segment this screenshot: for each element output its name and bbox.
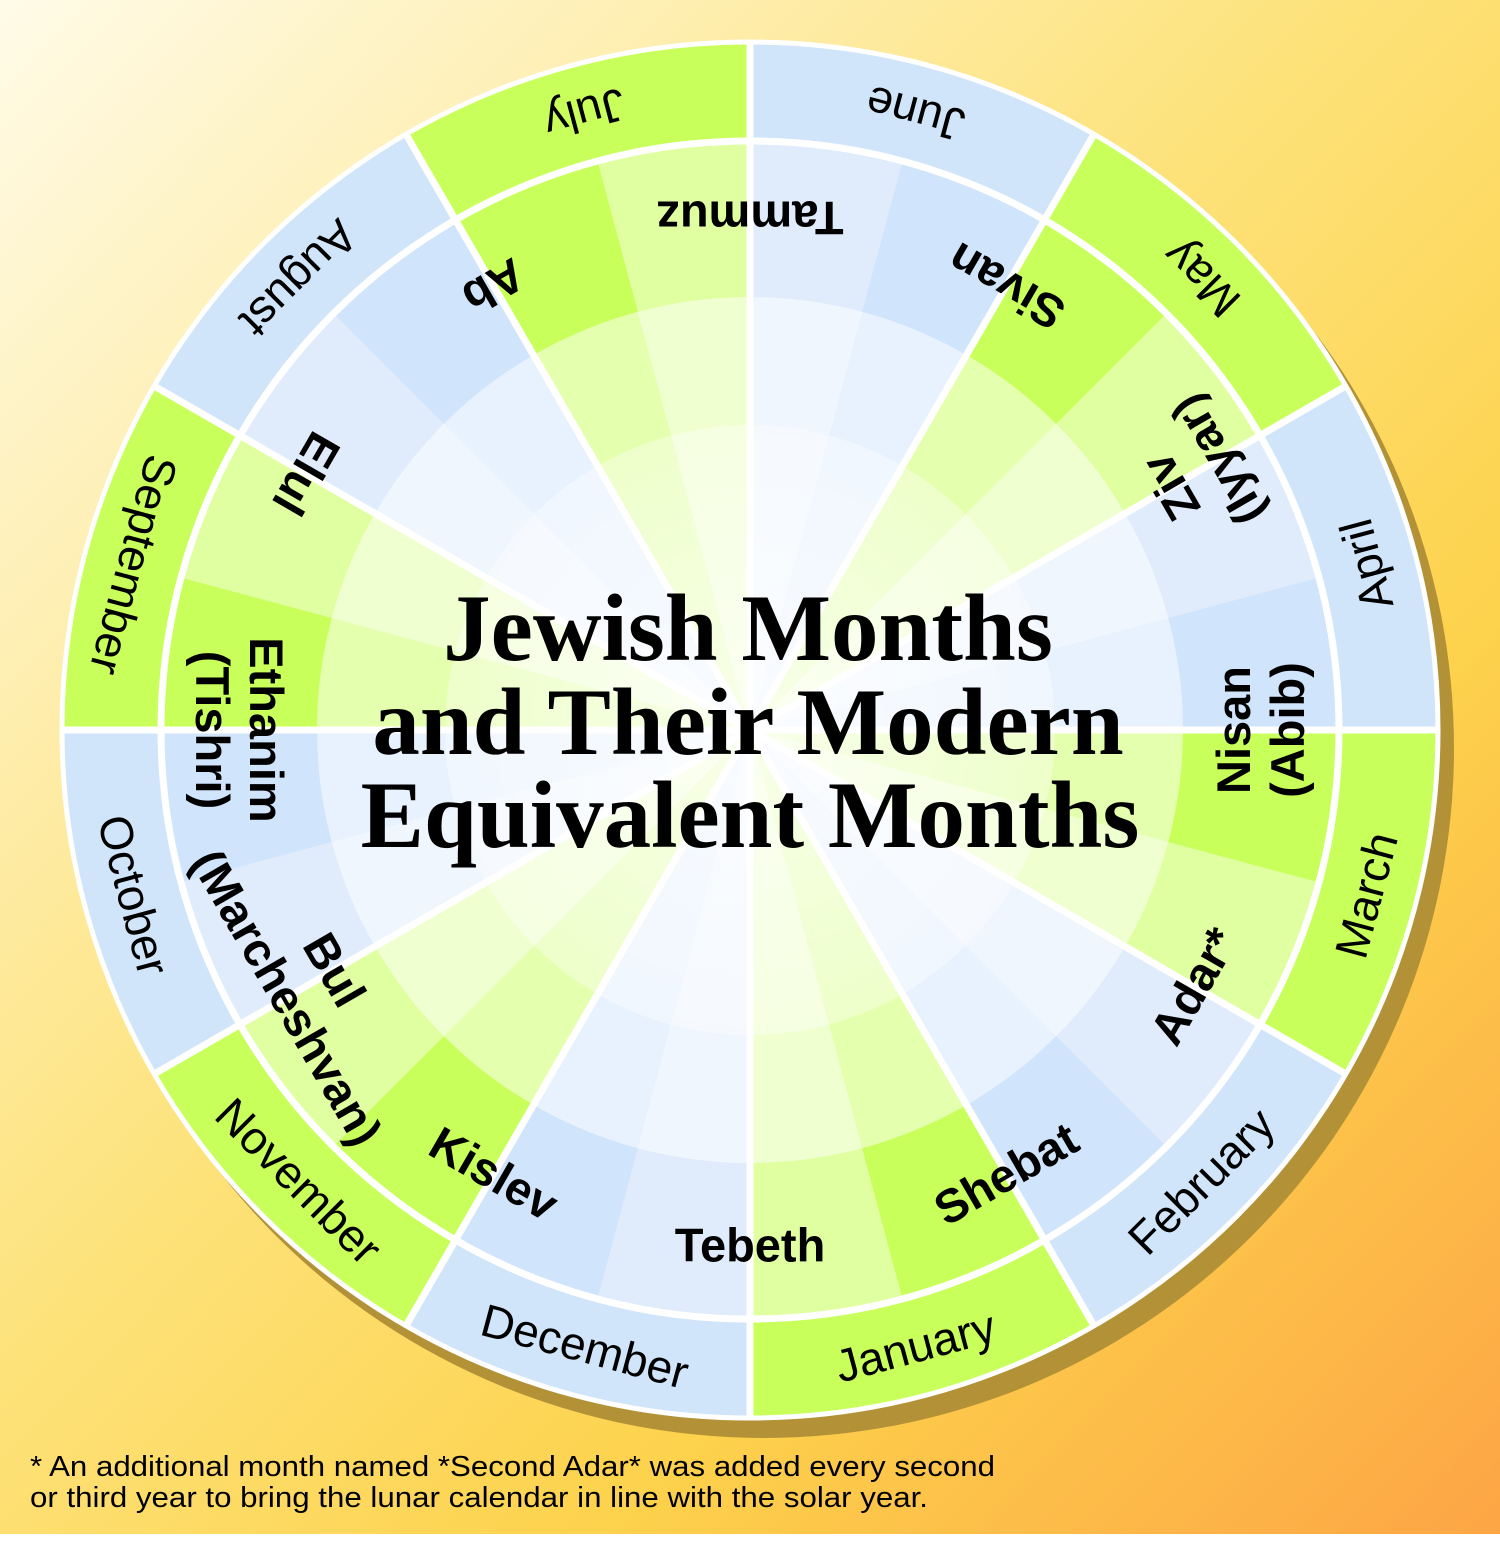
center disc lightening <box>445 425 1055 1035</box>
title: Jewish Months <box>443 575 1053 681</box>
modern month labels <box>80 76 1408 1399</box>
title: and Their Modern <box>372 669 1124 775</box>
Jewish month labels: Kislev <box>421 1116 567 1231</box>
inner ring lightening <box>317 297 1183 1163</box>
footnote <box>30 1451 995 1514</box>
modern month labels: August <box>230 210 368 348</box>
modern month labels: February <box>1118 1098 1285 1265</box>
modern month labels: November <box>205 1088 392 1275</box>
modern month labels: June <box>860 76 970 152</box>
Jewish month labels: Shebat <box>925 1111 1087 1236</box>
Jewish month labels: Elul <box>262 423 351 525</box>
Jewish month labels: (Marcheshvan) <box>182 840 393 1154</box>
Jewish month labels: (Iyyar) <box>1159 386 1275 535</box>
Jewish month labels: Tammuz <box>656 192 844 244</box>
Jewish month labels: (Abib) <box>1260 662 1314 798</box>
footnote: * An additional month named *Second Adar* was added every second <box>30 1451 995 1483</box>
modern month labels: January <box>829 1300 1001 1393</box>
Jewish month labels: (Tishri) <box>186 651 240 809</box>
Jewish month labels: Ethanim <box>240 637 294 823</box>
Jewish month labels: Bul <box>293 923 377 1016</box>
title: Equivalent Months <box>361 762 1139 868</box>
Jewish month labels: Adar* <box>1139 918 1248 1054</box>
Jewish month labels <box>182 192 1314 1272</box>
title <box>361 575 1139 868</box>
modern month labels: March <box>1325 827 1408 964</box>
modern month labels: April <box>1329 514 1403 616</box>
modern month labels: May <box>1152 230 1250 328</box>
modern month labels: September <box>80 449 188 680</box>
modern month labels: December <box>476 1294 694 1399</box>
middle ring sectors <box>333 313 1167 1147</box>
Jewish month labels: Ziv <box>1130 445 1210 530</box>
modern month labels: July <box>539 78 631 149</box>
Jewish month labels: Nisan <box>1206 666 1260 794</box>
Jewish month labels: Tebeth <box>675 1218 825 1272</box>
modern month labels: October <box>87 809 180 981</box>
Jewish month labels: Sivan <box>938 232 1074 341</box>
footnote: or third year to bring the lunar calendar in line with the solar year. <box>30 1482 928 1514</box>
Jewish month labels: Ab <box>454 248 534 325</box>
